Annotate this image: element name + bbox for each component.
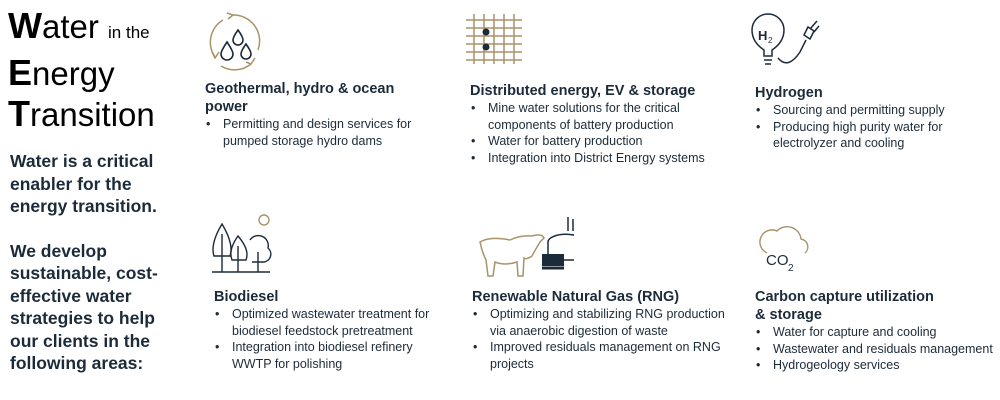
icon: grid bbox=[466, 14, 522, 64]
panel: biodiesel: Biodiesel bbox=[214, 289, 278, 305]
panel: distributed energy: Integration into District Energy systems bbox=[488, 150, 705, 164]
icon: CO2 cloud: 2 bbox=[788, 263, 794, 274]
panel: biodiesel bbox=[214, 289, 430, 370]
icon: CO2 cloud bbox=[759, 226, 808, 274]
icon: hydrogen: H bbox=[758, 28, 767, 43]
title bbox=[8, 5, 155, 134]
panel: hydrogen bbox=[755, 85, 945, 150]
icon: cow and digester bbox=[479, 217, 574, 277]
icon: hydrogen: 2 bbox=[768, 36, 773, 45]
icon: water cycle bbox=[210, 12, 260, 71]
panel: RNG: Improved residuals management on RNG projects bbox=[490, 340, 721, 370]
panel: carbon capture: Water for capture and cooling bbox=[773, 325, 937, 339]
panel: distributed energy: Distributed energy, EV & storage bbox=[470, 83, 695, 99]
panel: hydrogen: Sourcing and permitting supply bbox=[773, 103, 945, 117]
panel: distributed energy: Mine water solutions for the critical components of battery production bbox=[488, 101, 680, 132]
panel: RNG bbox=[472, 289, 725, 370]
intro text bbox=[10, 151, 158, 373]
panel: geothermal: Permitting and design services for pumped storage hydro dams bbox=[223, 117, 411, 148]
panel: carbon capture: Hydrogeology services bbox=[773, 358, 899, 372]
panel: biodiesel: Optimized wastewater treatment for biodiesel feedstock pretreatment bbox=[232, 307, 429, 338]
panel: RNG: Renewable Natural Gas (RNG) bbox=[472, 289, 679, 305]
intro text: Water is a critical enabler for the energy transition. bbox=[10, 151, 157, 216]
icon: trees bbox=[212, 214, 272, 273]
panel: RNG: Optimizing and stabilizing RNG production via anaerobic digestion of waste bbox=[490, 307, 725, 338]
panel: carbon capture bbox=[755, 289, 993, 372]
panel: distributed energy: Water for battery production bbox=[488, 134, 642, 148]
icon: hydrogen bbox=[751, 13, 820, 65]
icon: CO2 cloud: CO bbox=[766, 252, 788, 269]
panel: geothermal: Geothermal, hydro & ocean power bbox=[205, 81, 394, 115]
panel: distributed energy bbox=[470, 83, 705, 164]
panel: biodiesel: Integration into biodiesel refinery WWTP for polishing bbox=[232, 340, 413, 370]
title: Water in the bbox=[8, 5, 150, 46]
panel: hydrogen: Hydrogen bbox=[755, 85, 823, 101]
intro text: We develop sustainable, cost-effective water strategies to help our clients in the following areas: bbox=[10, 240, 158, 373]
panel: geothermal bbox=[205, 81, 412, 148]
title: Transition bbox=[8, 93, 155, 134]
panel: carbon capture: Wastewater and residuals management bbox=[773, 342, 993, 356]
panel: carbon capture: Carbon capture utilization & storage bbox=[755, 289, 934, 323]
panel: hydrogen: Producing high purity water for electrolyzer and cooling bbox=[773, 120, 943, 150]
title: Energy bbox=[8, 52, 115, 93]
